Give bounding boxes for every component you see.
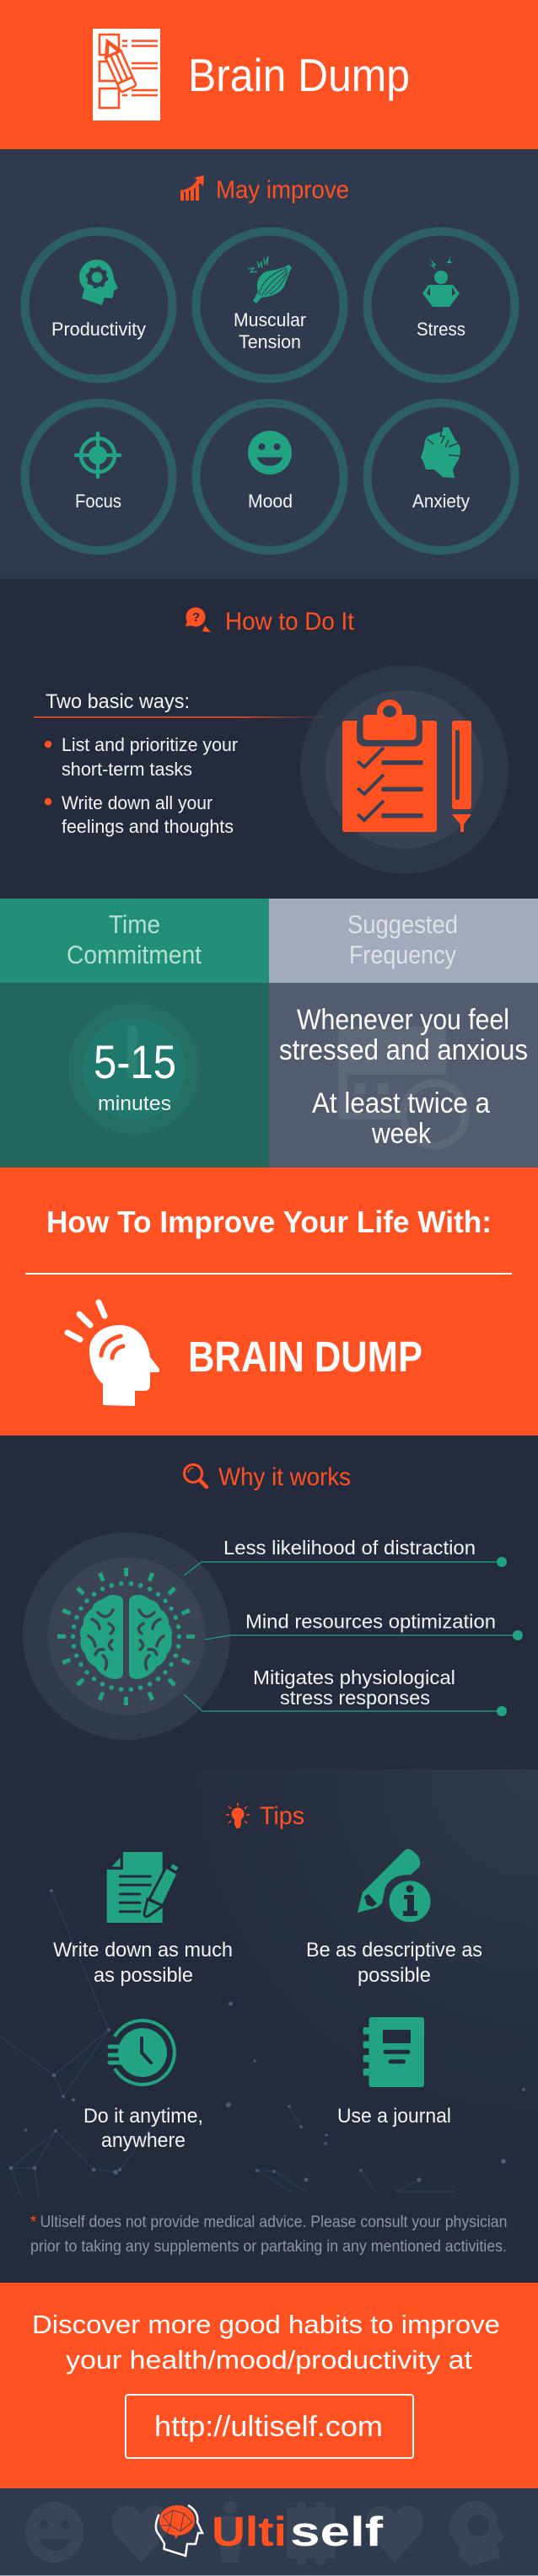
panel: suggested frequency: week (371, 1118, 432, 1150)
panel: suggested frequency: Whenever you feel (297, 1004, 509, 1036)
tip: write down as much as possible: as possible (94, 1964, 193, 1987)
callout: mind resources optimization: Mind resources optimization (245, 1610, 496, 1632)
item: mood: Mood (248, 491, 293, 512)
text block: two basic ways (34, 690, 328, 837)
illustration: brain with rays (23, 1532, 230, 1740)
icon: notebook (363, 2017, 424, 2087)
icon: head with rays (67, 1302, 159, 1406)
panel: time commitment: Time (109, 910, 160, 939)
panel: how to improve banner (0, 1167, 538, 1436)
illustration: clipboard and pen (300, 666, 508, 873)
panel: suggested frequency (269, 899, 538, 1167)
tip: be as descriptive as possible: Be as descriptive as (306, 1939, 482, 1962)
panel: header (0, 0, 538, 149)
callout: mind resources optimization (205, 1610, 523, 1640)
callout: less likelihood of distraction: Less likelihood of distraction (223, 1537, 476, 1559)
panel: time commitment: Commitment (67, 940, 202, 969)
item: muscular tension (196, 231, 344, 379)
tip: be as descriptive as possible: possible (358, 1964, 431, 1987)
tip: be as descriptive as possible (306, 1849, 482, 1987)
panel: tips (0, 1769, 538, 2283)
icon: target (76, 433, 120, 477)
panel: time commitment (0, 899, 269, 1167)
tip: use a journal (337, 2017, 451, 2128)
item: stress (368, 231, 514, 379)
callout: mitigates physiological stress responses: Mitigates physiological (253, 1666, 455, 1688)
panel: why it works (0, 1436, 538, 1769)
item: productivity (25, 231, 172, 379)
icon: pencil with info (358, 1849, 430, 1922)
tip: write down as much as possible: Write down as much (53, 1939, 233, 1962)
brand title: BRAIN DUMP (188, 1333, 422, 1381)
panel: call to action: your health/mood/productivity at (66, 2345, 472, 2375)
panel: time commitment: 5-15 (94, 1035, 176, 1088)
icon: document and pencil (107, 1852, 178, 1923)
disclaimer: * (30, 2214, 37, 2231)
item: focus (25, 403, 172, 550)
tip: write down as much as possible (53, 1852, 233, 1987)
icon: stressed person (422, 255, 460, 307)
icon: cracked head (421, 427, 460, 478)
text block: two basic ways: feelings and thoughts (62, 816, 234, 837)
tip: do it anytime, anywhere (83, 2021, 203, 2152)
icon: faint calendar (338, 1027, 465, 1146)
item: productivity: Productivity (51, 319, 146, 340)
heading: how to improve: How To Improve Your Life With: (46, 1205, 492, 1239)
tip: do it anytime, anywhere: Do it anytime, (83, 2105, 203, 2128)
icon: faint clock (68, 1003, 200, 1135)
text block: two basic ways: Two basic ways: (46, 690, 190, 713)
heading: may improve: May improve (216, 176, 349, 204)
item: focus: Focus (75, 491, 121, 512)
heading: tips (226, 1802, 304, 1830)
disclaimer (30, 2214, 508, 2256)
panel: call to action: Discover more good habits to improve (32, 2310, 500, 2339)
url button (126, 2395, 413, 2458)
heading: how to do it: ? (192, 610, 200, 625)
heading: why it works: Why it works (218, 1463, 351, 1491)
heading: how to do it: How to Do It (225, 608, 355, 636)
item: anxiety (368, 403, 514, 550)
callout: mitigates physiological stress responses (184, 1666, 507, 1716)
tip: do it anytime, anywhere: anywhere (101, 2129, 186, 2152)
item: anxiety: Anxiety (412, 491, 470, 512)
icon: brain in head (156, 2505, 202, 2556)
tip: use a journal: Use a journal (337, 2105, 451, 2128)
text block: two basic ways: short-term tasks (62, 759, 192, 780)
icon: smiley (248, 431, 292, 475)
disclaimer: prior to taking any supplements or partaking in any mentioned activities. (30, 2238, 507, 2256)
callout: less likelihood of distraction (184, 1537, 507, 1575)
icon: clock (110, 2021, 175, 2085)
icon: muscle (248, 256, 292, 303)
icon: checklist with pencil (93, 29, 160, 121)
title: Brain Dump (188, 49, 410, 101)
panel: how to do it (0, 579, 538, 899)
panel: suggested frequency: Frequency (349, 940, 456, 969)
url button: http://ultiself.com (154, 2411, 383, 2443)
panel: may improve (0, 149, 538, 579)
icon: head with gear (79, 260, 118, 305)
item: muscular tension: Tension (239, 331, 301, 352)
text block: two basic ways: Write down all your (62, 792, 213, 813)
panel: suggested frequency: At least twice a (312, 1087, 490, 1119)
callout: mitigates physiological stress responses: stress responses (280, 1687, 430, 1709)
heading: tips: Tips (260, 1802, 304, 1830)
item: mood (196, 403, 344, 550)
disclaimer: Ultiself does not provide medical advice. Please consult your physician (40, 2214, 508, 2231)
panel: suggested frequency: Suggested (347, 910, 458, 939)
logo: ultiself (156, 2505, 384, 2556)
panel: footer (0, 2488, 538, 2576)
item: muscular tension: Muscular (234, 309, 306, 330)
logo: ultiself: Ulti (212, 2509, 287, 2555)
panel: time commitment: minutes (98, 1092, 171, 1115)
text block: two basic ways: List and prioritize your (62, 734, 238, 755)
item: stress: Stress (417, 319, 465, 340)
logo: ultiself: self (290, 2509, 384, 2555)
panel: call to action (0, 2283, 538, 2488)
